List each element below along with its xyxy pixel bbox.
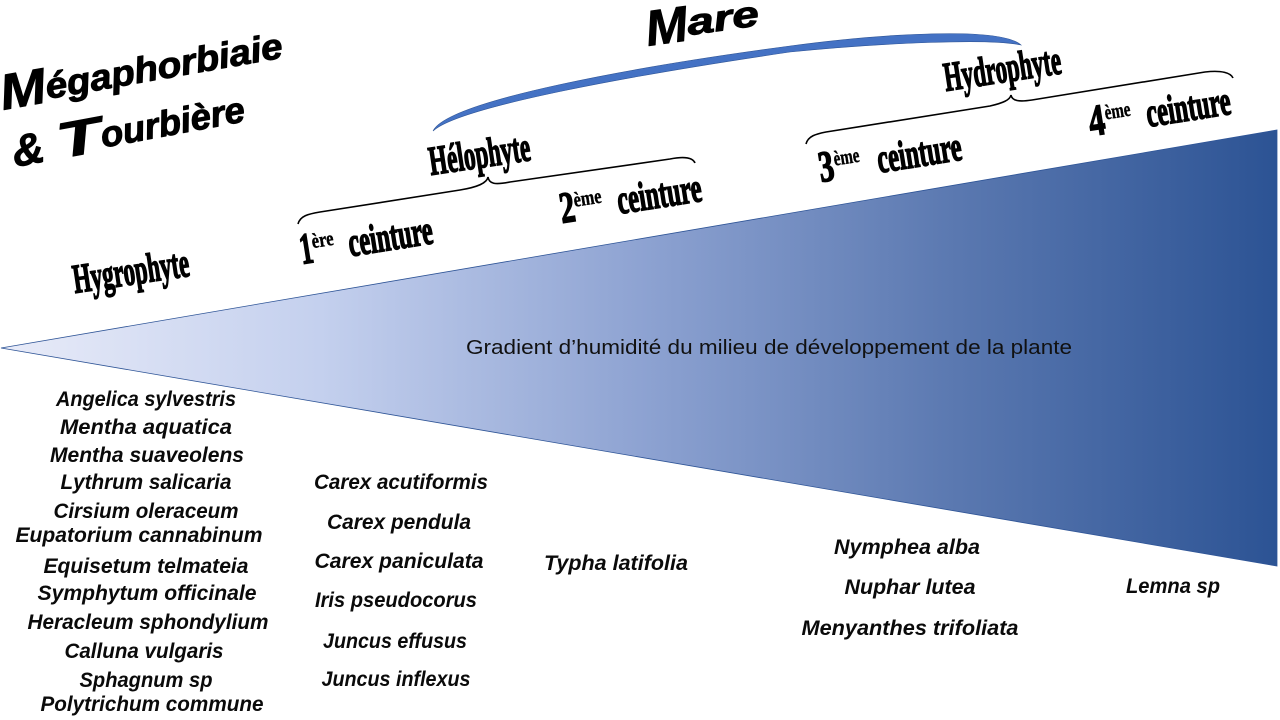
- label: 1ère ceinture: [296, 205, 436, 274]
- species list: 1ère ceinture: Juncus inflexus: [322, 668, 470, 691]
- label: Hygrophyte: Hygrophyte: [70, 239, 192, 302]
- species list: hygrophytes: Cirsium oleraceum: [54, 500, 238, 523]
- species: 4ème ceinture: Lemna sp: [1126, 575, 1220, 598]
- species list: 3ème ceinture: Nymphea alba: [834, 536, 980, 559]
- heading: Tourbière: T: [52, 105, 112, 169]
- label: 3ème ceinture: 3: [815, 141, 837, 192]
- brace: Hélophyte: [298, 158, 695, 224]
- label: 1ère ceinture: ceinture: [345, 206, 436, 265]
- species list: hygrophytes: Calluna vulgaris: [64, 640, 224, 663]
- heading: Tourbière: &: [8, 123, 48, 177]
- label: 2ème ceinture: 2: [556, 182, 578, 233]
- label: 4ème ceinture: [1085, 75, 1234, 146]
- gradient caption: Gradient d’humidité du milieu de développement de la plante: [466, 337, 1072, 359]
- label: 4ème ceinture: 4: [1085, 95, 1108, 146]
- species list: hygrophytes: Polytrichum commune: [40, 693, 264, 716]
- species list: hygrophytes: Heracleum sphondylium: [28, 611, 268, 634]
- heading: Mare: [642, 0, 762, 57]
- species: 2ème ceinture: Typha latifolia: [544, 552, 688, 575]
- species list: hygrophytes: Angelica sylvestris: [55, 388, 236, 411]
- species list: 3ème ceinture: [802, 536, 1019, 640]
- label: 1ère ceinture: 1: [296, 223, 316, 274]
- species list: hygrophytes: Mentha aquatica: [60, 416, 232, 439]
- species list: hygrophytes: Mentha suaveolens: [50, 444, 244, 467]
- species list: hygrophytes: [16, 388, 268, 716]
- label: 1ère ceinture: ère: [310, 226, 335, 253]
- species list: hygrophytes: Lythrum salicaria: [60, 471, 232, 494]
- species list: 1ère ceinture: [314, 471, 488, 691]
- heading: Mégaphorbiaie: [0, 16, 287, 121]
- species list: 3ème ceinture: Menyanthes trifoliata: [802, 617, 1019, 640]
- species list: hygrophytes: Eupatorium cannabinum: [16, 524, 262, 547]
- arc: Mare span: [433, 34, 1021, 131]
- label: 3ème ceinture: ème: [832, 143, 861, 171]
- species list: 1ère ceinture: Iris pseudocorus: [315, 589, 477, 612]
- label: 3ème ceinture: [815, 121, 965, 192]
- species list: 3ème ceinture: Nuphar lutea: [844, 576, 976, 599]
- species list: hygrophytes: Sphagnum sp: [80, 669, 213, 692]
- heading: Mégaphorbiaie: égaphorbiaie: [42, 25, 286, 107]
- heading: Tourbière: [7, 80, 249, 178]
- species list: 1ère ceinture: Carex paniculata: [314, 550, 484, 573]
- species list: 1ère ceinture: Juncus effusus: [323, 630, 467, 653]
- heading: Tourbière: ourbière: [97, 89, 248, 156]
- brace: Hydrophyte: [806, 71, 1233, 144]
- label: Hélophyte: Hélophyte: [426, 123, 533, 184]
- species list: hygrophytes: Symphytum officinale: [38, 582, 257, 605]
- species list: 1ère ceinture: Carex pendula: [327, 511, 471, 534]
- label: 2ème ceinture: ceinture: [613, 164, 705, 223]
- species list: hygrophytes: Equisetum telmateia: [44, 555, 249, 578]
- humidity gradient wedge: [1, 130, 1277, 566]
- label: 2ème ceinture: [556, 162, 705, 233]
- species list: 1ère ceinture: Carex acutiformis: [314, 471, 488, 494]
- label: 3ème ceinture: ceinture: [873, 123, 965, 182]
- label: Hydrophyte: Hydrophyte: [940, 37, 1064, 100]
- label: 2ème ceinture: ème: [572, 184, 603, 212]
- label: 4ème ceinture: ème: [1103, 97, 1132, 124]
